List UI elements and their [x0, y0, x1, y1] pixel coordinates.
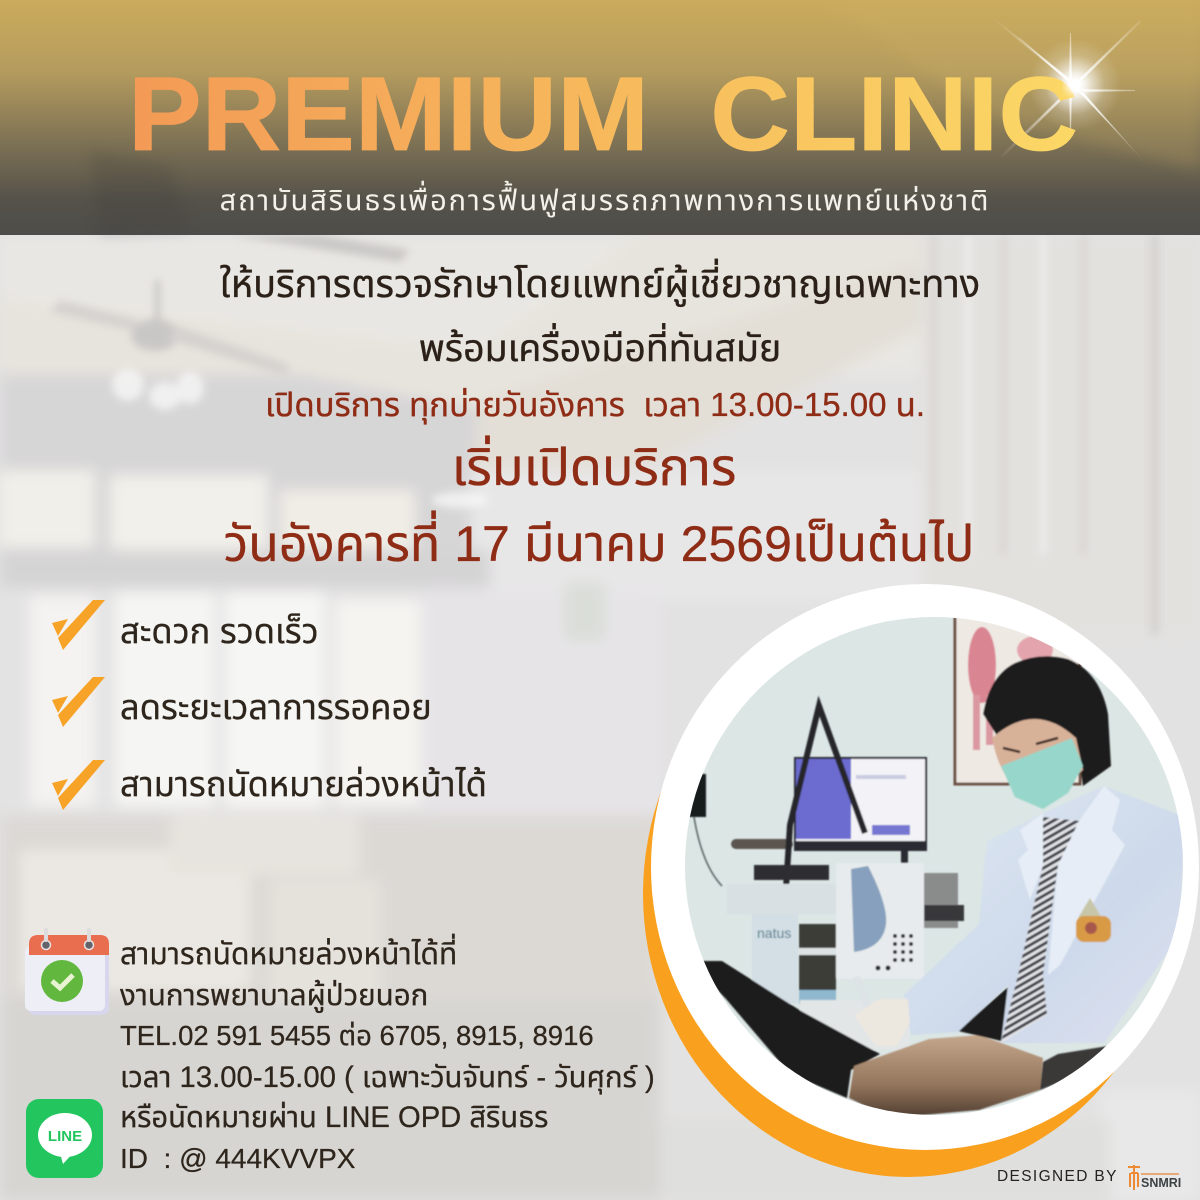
patient leg	[849, 1035, 1043, 1118]
monitor	[794, 757, 927, 863]
chair	[958, 987, 1010, 1043]
orange crescent	[643, 611, 1173, 1177]
sparkle core	[1018, 37, 1133, 148]
patient black clothing	[690, 961, 880, 1098]
anatomy poster	[955, 600, 1080, 784]
designer credit: DESIGNED BY	[997, 1168, 1118, 1185]
contact text: หรือนัดหมายผ่าน LINE OPD สิรินธร	[120, 1102, 548, 1134]
title: PREMIUM CLINIC	[128, 56, 1078, 173]
checkmark 3	[52, 760, 105, 810]
contact text: งานการพยาบาลผู้ป่วยนอก	[120, 979, 428, 1012]
logo: SNMRI	[1128, 1165, 1181, 1190]
shelves	[799, 924, 836, 1004]
rail	[731, 839, 793, 849]
lower cart	[800, 1000, 910, 1050]
start heading: เริ่มเปิดบริการ	[452, 439, 736, 497]
logo: SNMRI: SNMRI	[1141, 1176, 1181, 1190]
coat emblem	[1076, 898, 1111, 942]
ceiling	[0, 235, 1200, 375]
cart base	[750, 924, 800, 1006]
lab coat	[904, 786, 1185, 1043]
icon: LINE: LINE	[48, 1128, 82, 1145]
contact text	[120, 934, 655, 1174]
cart base: natus	[757, 925, 791, 941]
cart top	[782, 882, 790, 890]
contact text: TEL.02 591 5455 ต่อ 6705, 8915, 8916	[120, 1020, 594, 1051]
intro line 2: พร้อมเครื่องมือที่ทันสมัย	[419, 327, 781, 369]
contact text: ID : @ 444KVVPX	[120, 1143, 355, 1174]
hours: เปิดบริการ ทุกบ่ายวันอังคาร เวลา 13.00-15.00 น.	[265, 386, 925, 423]
striped blouse	[1001, 817, 1079, 1043]
sock	[1040, 1046, 1108, 1090]
icon: calendar	[25, 928, 109, 1015]
coat lapels	[1018, 786, 1125, 975]
gloved hand and probe	[853, 975, 910, 1046]
photo: doctor examining patient	[680, 600, 1190, 1120]
equipment arm	[786, 706, 865, 888]
black box on cart	[754, 865, 829, 880]
white circle	[651, 584, 1199, 1150]
start date: วันอังคารที่ 17 มีนาคม 2569เป็นต้นไป	[224, 516, 974, 572]
hair	[983, 656, 1111, 786]
beam	[0, 550, 490, 588]
benefit 3: สามารถนัดหมายล่วงหน้าได้	[120, 766, 487, 804]
subtitle: สถาบันสิรินธรเพื่อการฟื้นฟูสมรรถภาพทางการแพทย์แห่งชาติ	[220, 185, 990, 217]
checkmark 1	[52, 600, 105, 650]
header band	[0, 0, 1200, 235]
main unit	[836, 863, 924, 979]
lower windows	[0, 588, 420, 813]
icon: LINE	[26, 1099, 103, 1178]
upper windows	[0, 470, 95, 548]
surgical mask	[1001, 738, 1083, 809]
contact text: เวลา 13.00-15.00 ( เฉพาะวันจันทร์ - วันศุกร์ )	[120, 1061, 655, 1094]
sparkle	[993, 17, 1149, 167]
benefit 1: สะดวก รวดเร็ว	[120, 613, 319, 651]
right shelf	[924, 873, 964, 928]
sofa and floor	[0, 815, 660, 1200]
benefit 2: ลดระยะเวลาการรอคอย	[120, 689, 432, 727]
face	[992, 718, 1084, 774]
contact text: สามารถนัดหมายล่วงหน้าได้ที่	[120, 938, 457, 971]
intro line 1: ให้บริการตรวจรักษาโดยแพทย์ผู้เชี่ยวชาญเฉพาะทาง	[220, 264, 980, 306]
checkmark 2	[52, 677, 105, 727]
eyes	[1003, 738, 1058, 752]
left wall screen	[685, 774, 706, 817]
